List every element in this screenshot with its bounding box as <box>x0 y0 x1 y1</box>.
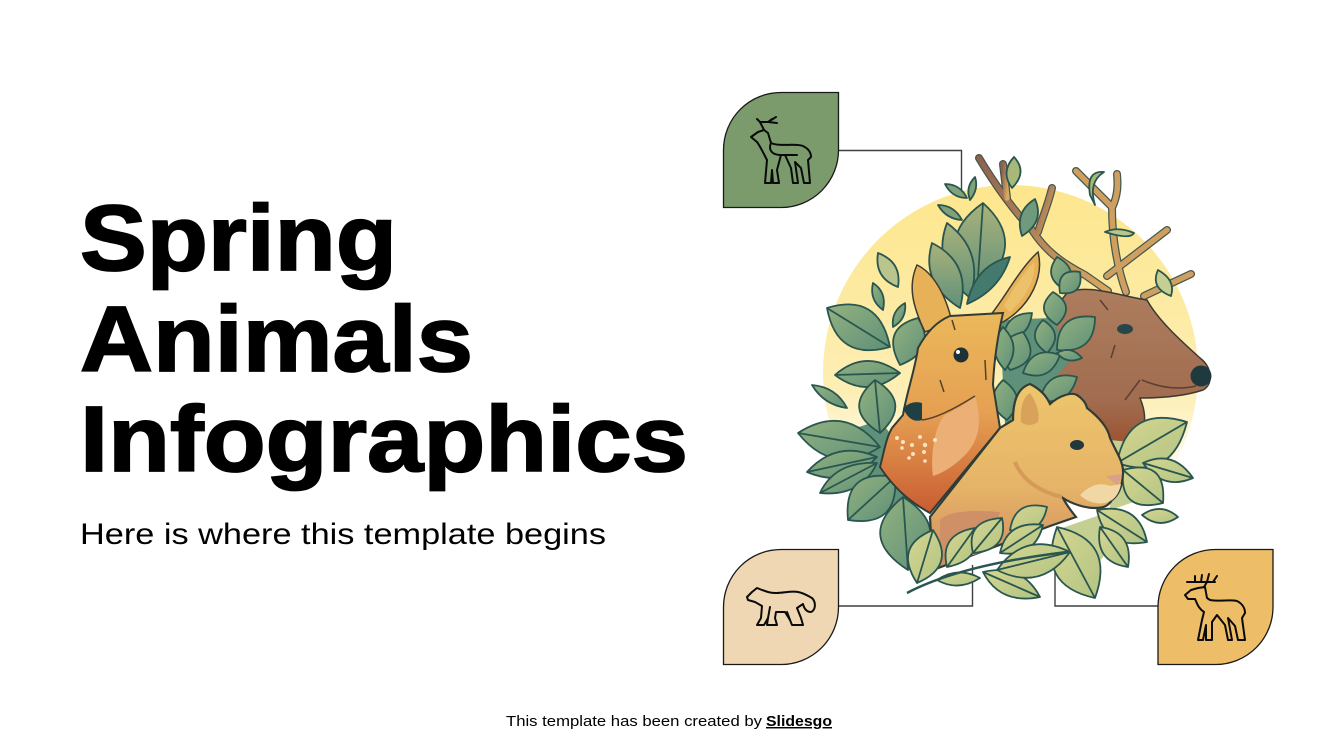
title: Animals <box>80 287 473 391</box>
title: Infographics <box>80 387 688 491</box>
right yellow-green leaves <box>1051 418 1193 598</box>
connector lines <box>838 150 1158 606</box>
stag eye <box>1117 324 1133 334</box>
antler leaves <box>1006 157 1172 296</box>
lioness inner ear and cheek <box>1021 393 1039 425</box>
badge: elk <box>1158 550 1273 664</box>
icon: wolverine <box>747 588 815 625</box>
icon: deer <box>751 117 811 183</box>
illustration: spring animals with leaves <box>798 157 1212 599</box>
top leaves behind doe <box>877 177 1010 308</box>
title: Spring <box>80 186 397 290</box>
title <box>80 186 688 491</box>
doe head <box>880 313 1003 513</box>
stag head <box>1030 289 1212 450</box>
badge: deer <box>724 92 838 208</box>
footer credit <box>506 714 832 730</box>
footer credit: Slidesgo <box>766 714 832 730</box>
doe light patch <box>932 396 979 476</box>
front leaf sprig <box>907 505 1070 599</box>
lioness nose <box>1106 474 1122 486</box>
lioness eye <box>1070 440 1084 450</box>
stag antlers <box>979 158 1191 296</box>
middle green leaves <box>993 257 1095 425</box>
badge: fox <box>724 550 838 664</box>
stag nose <box>1190 366 1212 386</box>
doe nose <box>903 402 922 421</box>
subtitle: Here is where this template begins <box>80 518 606 551</box>
doe spots <box>895 435 937 463</box>
lioness head <box>930 384 1123 570</box>
footer credit: This template has been created by <box>506 714 763 730</box>
doe ears <box>912 252 1040 332</box>
doe eye <box>954 348 968 362</box>
yellow sun circle <box>823 185 1198 560</box>
icon: elk <box>1185 574 1245 640</box>
left green leaves <box>798 283 930 570</box>
